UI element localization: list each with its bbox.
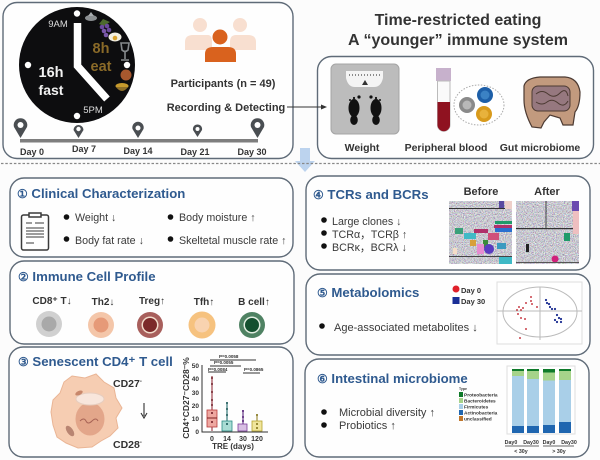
heading: ③ Senescent CD4⁺ T cell: [18, 354, 173, 369]
heading: ⑤ Metabolomics: [317, 285, 419, 300]
divider: [1, 162, 600, 164]
list: microbiome: Microbial diversity ↑: [339, 407, 435, 419]
legend: day groups: Day 0: [461, 286, 481, 295]
list: clinical left: [64, 212, 144, 247]
recording label: Recording & Detecting: [167, 102, 285, 114]
cell: CD8: CD8⁺ T↓: [32, 296, 72, 307]
icon: intestine: [500, 77, 580, 154]
heading: ① Clinical Characterization: [17, 186, 185, 201]
icon: weight scale: [331, 64, 399, 154]
list: repertoire: TCRα，TCRβ ↑: [332, 229, 407, 241]
timeline: Day 30: [237, 147, 267, 157]
list: repertoire: BCRκ，BCRλ ↓: [332, 242, 407, 254]
chart: box plot: 50: [192, 363, 199, 370]
list: clinical right: Skeltetal muscle rate ↑: [179, 235, 287, 247]
timeline: [14, 118, 267, 157]
legend: day groups: [452, 286, 485, 306]
cell: B cell: [238, 297, 270, 338]
chart: box plot: 40: [192, 376, 199, 383]
chart: stacked bars: [505, 366, 577, 455]
bullet: metabolites: Age-associated metabolites ↓: [334, 322, 478, 334]
panel: intestinal microbiome: [305, 359, 589, 457]
icon: clock: 8h: [93, 41, 109, 57]
icon: clock: 9AM: [48, 19, 68, 30]
cell: CD8: [32, 296, 72, 337]
panel: clinical characterization: [10, 178, 293, 257]
chart: box plot: [181, 354, 268, 451]
heading: ⑥ Intestinal microbiome: [317, 371, 468, 386]
chart: PCA scatter: [497, 282, 582, 344]
heading: ④ TCRs and BCRs: [313, 187, 429, 202]
chart: stacked bars: < 30y: [514, 449, 528, 455]
chart: stacked bars: Day0: [505, 440, 517, 446]
arrow: CD27 to CD28: [141, 403, 147, 418]
participants label: Participants (n = 49): [171, 78, 276, 90]
legend: day groups: Day 30: [461, 297, 485, 306]
icon: clock: [19, 7, 135, 123]
panel: immune cell profile: [10, 261, 294, 344]
cell: Tfh: Tfh↑: [194, 297, 214, 308]
panel: measurements: [318, 56, 594, 158]
icon: clock: 16h: [38, 65, 64, 81]
chart: box plot: P=0.0058: [219, 354, 239, 359]
icon: participants: [185, 18, 256, 62]
chart: box plot: 120: [251, 436, 263, 443]
timeline: Day 7: [72, 144, 96, 154]
chart: box plot: 30: [239, 436, 247, 443]
list: clinical left: Weight ↓: [75, 212, 116, 224]
icon: clock: 5PM: [83, 105, 103, 116]
CD28 label: CD28: [113, 439, 140, 451]
chart: stacked bars: Day0: [543, 440, 555, 446]
chart: stacked bars: Day30: [561, 440, 577, 446]
list: repertoire: [321, 216, 407, 254]
cell: Th2: [88, 297, 114, 338]
icon: clock: eat: [91, 59, 112, 75]
illustration: T cell: [51, 374, 122, 448]
label: after: After: [534, 186, 561, 198]
cell: B cell: B cell↑: [238, 297, 270, 308]
arrow: recording to measurements: [287, 104, 327, 110]
chart: stacked bars: > 30y: [552, 449, 566, 455]
title: Time-restricted eating: [375, 12, 541, 29]
chart: box plot: 14: [223, 436, 231, 443]
legend: taxa: Proteobacteria: [464, 392, 498, 398]
chart: before treemap: [449, 201, 512, 264]
icon: weight scale: Weight: [345, 142, 380, 154]
timeline: Day 21: [180, 147, 210, 157]
panel: study design: [3, 2, 293, 158]
chart: box plot: 10: [192, 416, 199, 423]
list: clinical right: [168, 212, 287, 247]
cell: Th2: Th2↓: [92, 297, 114, 308]
icon: blood tube and cells: [405, 68, 504, 154]
timeline: Day 14: [123, 146, 153, 156]
legend: taxa: Actinobacteria: [464, 410, 498, 416]
chart: box plot: TRE (days): [212, 442, 254, 451]
chart: box plot: P=0.0865: [244, 367, 264, 372]
chart: after treemap: [516, 201, 579, 264]
chart: box plot: CD4⁺CD27⁻CD28⁻%: [181, 357, 191, 439]
heading: ② Immune Cell Profile: [18, 269, 156, 284]
CD27 label: CD27: [113, 378, 140, 390]
icon: food items: [85, 12, 132, 91]
chart: box plot: P=0.0055: [214, 360, 234, 365]
chart: box plot: 0: [210, 436, 214, 443]
panel: senescent CD4 T cell: [9, 347, 293, 457]
chart: stacked bars: Day30: [523, 440, 539, 446]
chart: box plot: 20: [192, 403, 199, 410]
CD28 label: -: [140, 440, 142, 446]
chart: box plot: 0: [195, 429, 199, 436]
icon: clock: fast: [39, 82, 64, 98]
legend: taxa: unclassified: [464, 416, 492, 422]
legend: taxa: Type: [459, 387, 467, 391]
list: microbiome: Probiotics ↑: [339, 420, 396, 432]
panel: TCRs and BCRs: [306, 176, 590, 270]
panel: metabolomics: [306, 274, 590, 355]
legend: taxa: Bacteroidetes: [464, 398, 496, 404]
chart: box plot: 30: [192, 390, 199, 397]
arrow: big down arrow: [295, 148, 315, 172]
legend: taxa: Firmicutes: [464, 404, 489, 410]
list: clinical left: Body fat rate ↓: [75, 235, 144, 247]
label: before: Before: [464, 186, 498, 198]
cell: Tfh: [188, 297, 216, 338]
list: clinical right: Body moisture ↑: [179, 212, 256, 224]
list: repertoire: Large clones ↓: [332, 216, 402, 228]
list: microbiome: [321, 407, 435, 432]
cell: Treg: [137, 296, 165, 338]
title: [348, 12, 568, 49]
icon: blood tube and cells: Peripheral blood: [405, 142, 487, 154]
icon: clipboard: [22, 213, 48, 250]
chart: box plot: P=0.0084: [208, 367, 228, 372]
cell: Treg: Treg↑: [139, 296, 165, 307]
CD27 label: -: [140, 379, 142, 385]
title: A “younger” immune system: [348, 32, 568, 49]
icon: intestine: Gut microbiome: [500, 142, 580, 154]
legend: taxa: [459, 387, 498, 422]
timeline: Day 0: [20, 147, 44, 157]
